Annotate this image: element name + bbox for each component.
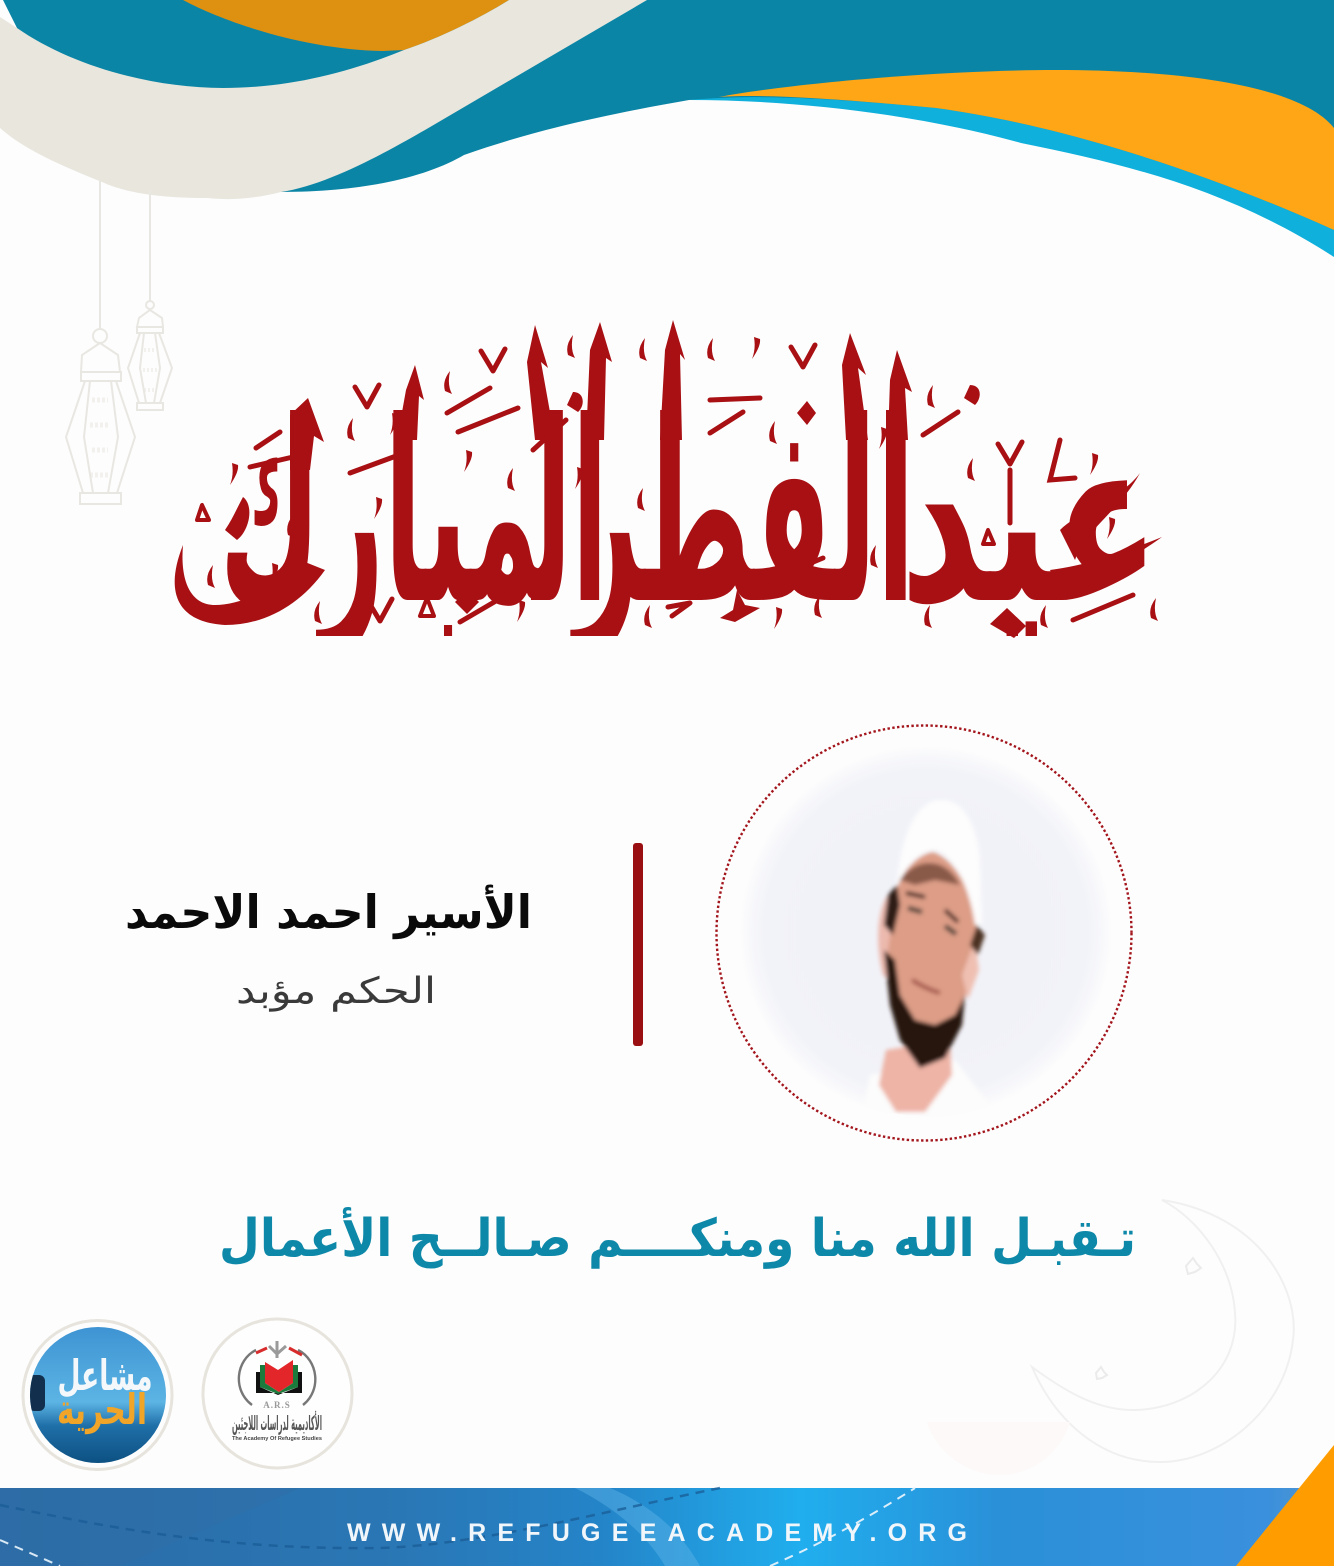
orange corner triangle	[1236, 1445, 1334, 1566]
icon: hanging lanterns	[66, 180, 172, 504]
title words: الفطر	[570, 368, 915, 661]
crescent moon	[1032, 1200, 1294, 1462]
book black	[256, 1372, 302, 1395]
lantern small	[128, 190, 172, 410]
ornaments: comma hooks	[230, 337, 1115, 629]
ear right	[962, 940, 979, 1000]
wave: cream	[0, 0, 647, 199]
footer band	[0, 1488, 1334, 1566]
footer sheen	[575, 1488, 700, 1566]
website text: WWW.REFUGEEACADEMY.ORG	[347, 1519, 967, 1547]
ornaments: kasra bars and strokes	[250, 388, 1133, 622]
title words: عيد	[900, 388, 1160, 655]
sweeping tails	[175, 473, 1162, 625]
logo sky	[25, 1325, 171, 1465]
shirt	[870, 1062, 974, 1098]
wave: teal main	[0, 0, 1334, 240]
title words	[227, 410, 1144, 636]
title: calligraphy Eid al-Fitr	[175, 320, 1162, 661]
english name: The Academy Of Refugee Studies	[232, 1436, 322, 1442]
ornaments: v marks	[355, 345, 1022, 621]
neck	[879, 1040, 952, 1112]
text: prisoner name: الأسير احمد الاحمد	[125, 884, 532, 939]
eyebrows and eyes	[906, 893, 958, 922]
portrait	[870, 801, 988, 1114]
red and green swooshes	[256, 1348, 302, 1355]
cap	[897, 800, 982, 925]
photo background	[742, 748, 1110, 1116]
title words: ‍مبارك	[220, 368, 546, 661]
book red	[265, 1360, 293, 1392]
logo: Academy of Refugee Studies	[203, 1319, 352, 1468]
ear and skin left	[876, 892, 893, 982]
text: sentence: الحكم مؤبد	[236, 971, 436, 1012]
divider bar	[633, 843, 643, 1046]
dotted ring	[716, 726, 1132, 1140]
photo: portrait in dotted circle	[716, 726, 1132, 1140]
face	[888, 852, 977, 1050]
title words: ال‍	[531, 368, 608, 659]
logo ring	[23, 1320, 172, 1470]
ornaments: upright hooks	[207, 335, 1158, 628]
logo ring	[203, 1319, 352, 1468]
logo text white: مشاعل	[58, 1351, 152, 1400]
book green	[260, 1365, 298, 1394]
logo text orange: الحرية	[57, 1385, 147, 1435]
logo: Mashael al-Hurriya	[23, 1320, 172, 1470]
mouth	[912, 980, 940, 993]
figure on book	[269, 1341, 286, 1358]
icon: crescent and stars	[927, 1200, 1294, 1475]
wave: orange band	[719, 70, 1334, 230]
wave: cyan band	[689, 97, 1334, 257]
ornaments: dots and hamzas	[225, 385, 1026, 638]
tall pennant strokes	[290, 320, 912, 470]
top wave banner	[0, 0, 1334, 257]
wave: dark orange	[183, 0, 509, 51]
acronym: A.R.S	[263, 1400, 291, 1410]
star one	[1186, 1258, 1201, 1274]
hair left	[884, 885, 900, 935]
hair right	[970, 925, 985, 955]
text: blessing slogan: تـقبـل الله منا ومنكــــم صـالــح الأعمال	[219, 1206, 1136, 1269]
footer dashed lines	[0, 1540, 60, 1566]
lantern large	[66, 180, 135, 504]
ornaments: small triangles	[197, 505, 994, 616]
text: الأكاديمية لدراسات اللاجئين	[232, 1410, 322, 1435]
wreath	[239, 1350, 315, 1405]
beard	[884, 950, 965, 1068]
star two	[1096, 1367, 1107, 1379]
faint pink half-circle	[927, 1422, 1070, 1475]
